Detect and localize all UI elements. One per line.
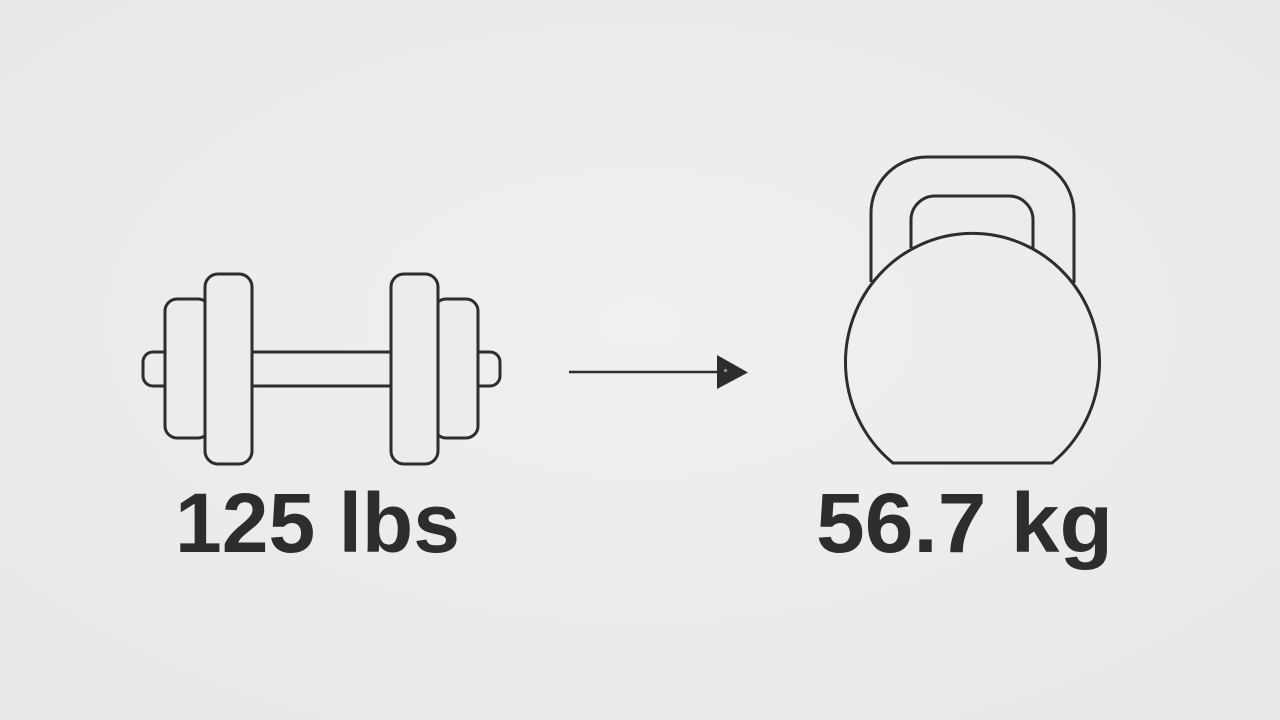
- icon: kettlebell: [845, 157, 1100, 463]
- arrow: [569, 355, 748, 389]
- label: 125 lbs: 125 lbs: [175, 476, 460, 570]
- icon: dumbbell: [143, 274, 500, 464]
- label: 56.7 kg: 56.7 kg: [816, 476, 1113, 570]
